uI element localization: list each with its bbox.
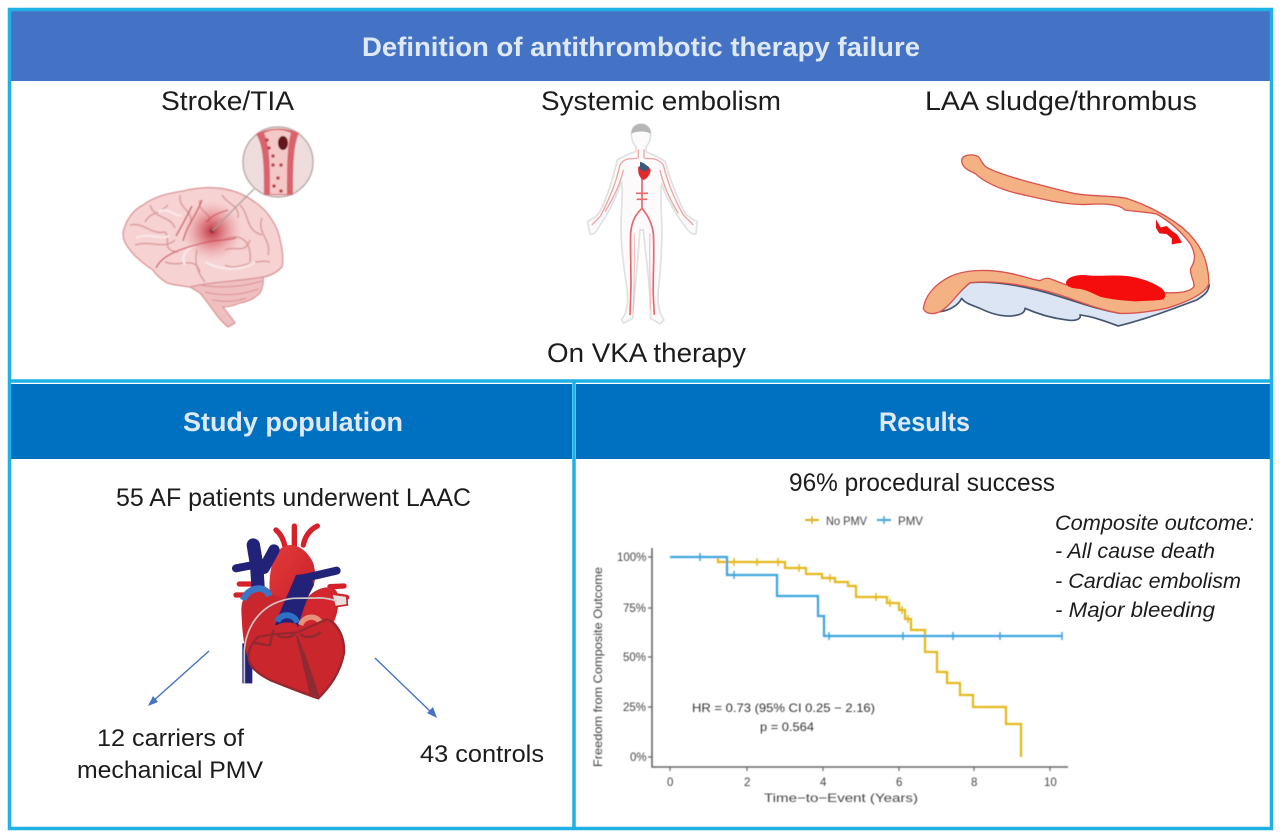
text: composite outcome list <box>1055 512 1254 622</box>
chart axes <box>591 548 1068 805</box>
text: procedural success: 96% procedural success <box>789 469 1055 497</box>
text: composite outcome list: - Cardiac embolism <box>1055 570 1241 593</box>
icon: human body circulation <box>587 124 697 324</box>
chart axes: 8 <box>971 777 977 789</box>
chart legend <box>805 516 923 528</box>
chart axes: 25% <box>623 702 646 714</box>
icon: LAA with sludge and thrombus <box>923 155 1209 326</box>
text: composite outcome list: Composite outcome: <box>1055 512 1254 535</box>
header bar: study population <box>10 384 572 459</box>
chart legend: No PMV <box>826 516 867 528</box>
chart axes: 50% <box>623 652 646 664</box>
text: controls: 43 controls <box>420 741 544 768</box>
chart axes: 0% <box>630 752 647 764</box>
censor marks <box>700 553 1062 640</box>
text: PMV carriers <box>77 725 263 784</box>
text: PMV carriers: 12 carriers of <box>97 725 244 752</box>
annotation: hazard ratio <box>692 701 875 734</box>
chart axes: 10 <box>1044 777 1057 789</box>
text: PMV carriers: mechanical PMV <box>77 757 263 784</box>
header bar: results: Results <box>879 407 970 437</box>
chart: Kaplan-Meier freedom from composite outcome <box>591 516 1068 805</box>
chart axes: 2 <box>744 777 750 789</box>
header bar: study population: Study population <box>183 407 403 437</box>
curve: no PMV <box>718 557 1021 757</box>
header bar: definition: Definition of antithrombotic therapy failure <box>362 32 920 62</box>
header bar: definition <box>10 11 1270 81</box>
panel: results <box>576 384 1270 805</box>
icon: heart with PMV lead <box>236 526 347 698</box>
label: stroke: Stroke/TIA <box>161 86 294 116</box>
chart axes: Freedom from Composite Outcome <box>591 567 605 767</box>
icon: brain with vessel inset <box>123 127 313 327</box>
curve: PMV <box>670 557 1062 636</box>
panel: definition of therapy failure <box>10 11 1270 368</box>
label: on VKA therapy: On VKA therapy <box>547 338 747 368</box>
chart axes: 6 <box>896 777 902 789</box>
label: LAA sludge: LAA sludge/thrombus <box>925 86 1197 116</box>
chart axes: Time−to−Event (Years) <box>764 791 918 805</box>
annotation: hazard ratio: p = 0.564 <box>760 720 814 734</box>
chart axes: 0 <box>667 777 673 789</box>
text: patient count: 55 AF patients underwent LAAC <box>116 484 471 512</box>
chart axes: 75% <box>623 603 646 615</box>
text: composite outcome list: - Major bleeding <box>1055 599 1215 622</box>
text: composite outcome list: - All cause death <box>1055 540 1215 563</box>
chart axes: 4 <box>820 777 827 789</box>
chart legend: PMV <box>898 516 923 528</box>
chart axes: 100% <box>617 552 646 564</box>
panel: study population <box>10 384 572 784</box>
annotation: hazard ratio: HR = 0.73 (95% CI 0.25 − 2.16) <box>692 701 875 715</box>
label: systemic embolism: Systemic embolism <box>541 86 781 116</box>
arrow: to controls <box>375 658 437 718</box>
header bar: results <box>576 384 1270 459</box>
arrow: to PMV carriers <box>148 651 209 706</box>
